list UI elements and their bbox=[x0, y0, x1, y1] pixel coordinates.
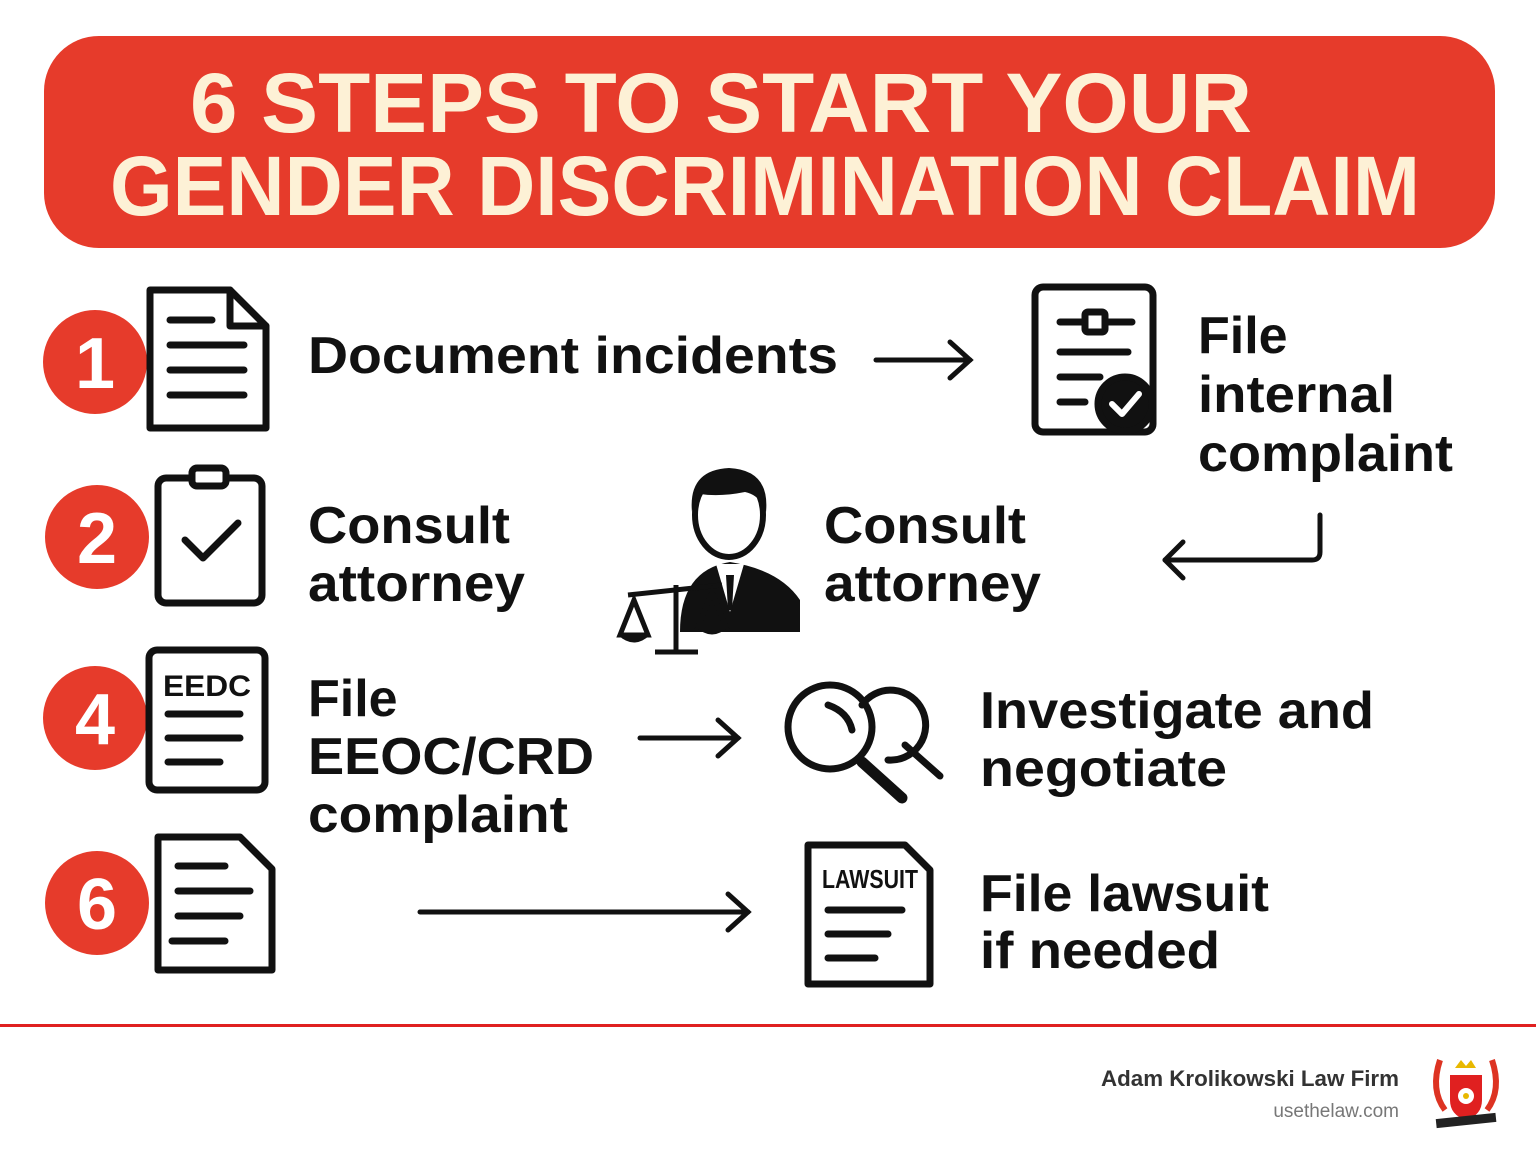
text: consult attorney 2: Consult bbox=[824, 497, 1026, 555]
title banner bbox=[44, 36, 1495, 248]
arrow return bbox=[1165, 515, 1320, 578]
footer: firm name: usethelaw.com bbox=[1273, 1101, 1399, 1122]
icon: EEDC doc: EEDC bbox=[163, 670, 251, 703]
title banner: GENDER DISCRIMINATION CLAIM bbox=[110, 139, 1420, 233]
title banner: 6 STEPS TO START YOUR bbox=[190, 56, 1252, 150]
text: file internal complaint: File bbox=[1198, 307, 1288, 365]
arrow 4 bbox=[640, 720, 738, 756]
text: consult attorney 2: attorney bbox=[824, 555, 1041, 613]
footer logo bbox=[1436, 1060, 1496, 1128]
footer divider bbox=[0, 1024, 1536, 1027]
icon: clipboard bbox=[158, 468, 262, 603]
icon: internal complaint bbox=[1035, 287, 1153, 432]
text: investigate and negotiate bbox=[980, 682, 1374, 798]
step 6 number bbox=[45, 851, 149, 955]
icon: EEDC doc bbox=[149, 650, 265, 790]
text: consult attorney bbox=[308, 497, 525, 613]
footer: firm name: Adam Krolikowski Law Firm bbox=[1101, 1066, 1399, 1091]
text: investigate and negotiate: Investigate and bbox=[980, 682, 1374, 740]
text: investigate and negotiate: negotiate bbox=[980, 740, 1227, 798]
step 2 number bbox=[45, 485, 149, 589]
icon: lawsuit doc: LAWSUIT bbox=[822, 864, 918, 894]
step 6 number: 6 bbox=[77, 865, 117, 945]
icon: magnifiers bbox=[788, 685, 940, 798]
text: file lawsuit if needed: if needed bbox=[980, 922, 1220, 980]
step 4 number: 4 bbox=[75, 680, 115, 760]
text: file EEOC/CRD complaint: complaint bbox=[308, 786, 568, 844]
text: file EEOC/CRD complaint: EEOC/CRD bbox=[308, 728, 594, 786]
arrow 1 bbox=[876, 342, 970, 378]
icon: attorney with scales bbox=[618, 468, 800, 652]
step 4 number bbox=[43, 666, 147, 770]
icon: document 6 bbox=[158, 837, 272, 970]
text: consult attorney: Consult bbox=[308, 497, 510, 555]
text: file lawsuit if needed: File lawsuit bbox=[980, 865, 1269, 923]
text: file EEOC/CRD complaint: File bbox=[308, 670, 398, 728]
text: consult attorney 2 bbox=[824, 497, 1041, 613]
text: file internal complaint: internal bbox=[1198, 366, 1395, 424]
step 1 number: 1 bbox=[75, 324, 115, 404]
icon: document 1 bbox=[150, 290, 266, 428]
step 1 number bbox=[43, 310, 147, 414]
text: document incidents: Document incidents bbox=[308, 327, 838, 385]
text: file internal complaint bbox=[1198, 307, 1453, 483]
icon: lawsuit doc bbox=[808, 845, 930, 984]
text: file EEOC/CRD complaint bbox=[308, 670, 594, 844]
footer: firm name bbox=[1101, 1066, 1399, 1122]
text: file lawsuit if needed bbox=[980, 865, 1269, 980]
arrow 6 bbox=[420, 894, 748, 930]
text: file internal complaint: complaint bbox=[1198, 425, 1453, 483]
text: consult attorney: attorney bbox=[308, 555, 525, 613]
step 2 number: 2 bbox=[77, 499, 117, 579]
